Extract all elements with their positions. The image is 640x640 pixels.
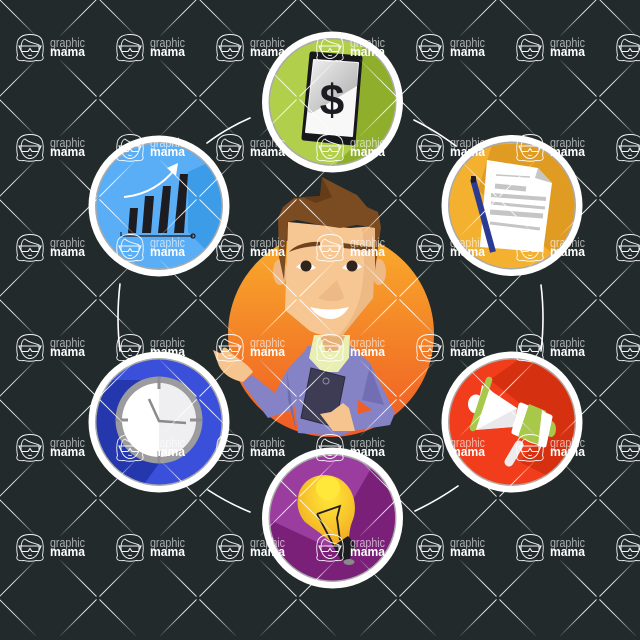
graphicmama logo watermarks: graphic — [450, 36, 485, 50]
graphicmama logo watermarks: graphic — [250, 36, 285, 50]
graphicmama logo watermarks: mama — [350, 44, 386, 59]
graphicmama logo watermarks: graphic — [450, 436, 485, 450]
clock hands — [149, 399, 186, 423]
gap between arm and body — [358, 400, 372, 414]
graphicmama logo watermarks: graphic — [450, 136, 485, 150]
paper — [480, 160, 552, 252]
bulb glass — [298, 475, 355, 547]
graphicmama logo watermarks: graphic — [150, 536, 185, 550]
graphicmama logo watermarks: mama — [350, 244, 386, 259]
graphicmama logo watermarks: graphic — [550, 436, 585, 450]
connector arcs between icons — [118, 118, 543, 512]
graphicmama logo watermarks: graphic — [250, 136, 285, 150]
icon: light bulb — [260, 448, 403, 590]
megaphone green bump — [546, 421, 556, 437]
graphicmama logo watermarks: graphic — [150, 336, 185, 350]
icon: phone with dollar sign — [262, 32, 410, 172]
graphicmama logo watermarks: graphic — [150, 436, 185, 450]
megaphone head — [514, 405, 550, 445]
smile — [310, 307, 349, 319]
ears — [273, 259, 287, 285]
graphicmama logo watermarks: mama — [50, 144, 86, 159]
orange backdrop circle — [228, 231, 434, 437]
face — [285, 222, 376, 336]
central businessman illustration — [213, 177, 434, 437]
graphicmama logo watermarks: graphic — [450, 536, 485, 550]
graphicmama logo watermarks: graphic — [150, 36, 185, 50]
graphicmama logo watermarks: mama — [550, 244, 586, 259]
graphicmama logo watermarks: graphic — [350, 36, 385, 50]
graphicmama logo watermarks: mama — [350, 544, 386, 559]
phone body — [304, 54, 360, 143]
bulb filament — [317, 506, 340, 546]
graphicmama logo watermarks: mama — [450, 544, 486, 559]
clock face — [122, 383, 196, 457]
icon: document and pen — [442, 135, 582, 276]
graphicmama logo watermarks: graphic — [550, 336, 585, 350]
graphicmama logo watermarks: mama — [150, 544, 186, 559]
graphicmama logo watermarks: mama — [250, 344, 286, 359]
graphicmama logo watermarks: graphic — [50, 436, 85, 450]
graphicmama logo watermarks: graphic — [250, 436, 285, 450]
graphicmama logo watermarks: graphic — [250, 236, 285, 250]
graphicmama logo watermarks: mama — [250, 544, 286, 559]
graphicmama logo watermarks: mama — [350, 144, 386, 159]
graphicmama logo watermarks: graphic — [50, 236, 85, 250]
graphicmama logo watermarks: mama — [450, 44, 486, 59]
pen — [473, 179, 493, 252]
graphicmama logo watermarks: mama — [450, 144, 486, 159]
graphicmama logo watermarks: graphic — [550, 36, 585, 50]
eyebrows — [289, 242, 320, 252]
bulb base — [333, 536, 356, 560]
megaphone cone — [473, 385, 517, 430]
graphicmama logo watermarks: graphic — [50, 36, 85, 50]
graphicmama logo watermarks: graphic — [550, 136, 585, 150]
clock ticks — [116, 377, 202, 463]
paper lines — [490, 175, 546, 229]
graphicmama logo watermarks: mama — [350, 344, 386, 359]
graphicmama logo watermarks: graphic — [550, 236, 585, 250]
graphicmama logo watermarks: mama — [250, 144, 286, 159]
jacket torso — [293, 345, 395, 436]
icon: clock — [88, 352, 230, 492]
graphicmama logo watermarks: mama — [50, 444, 86, 459]
hair — [278, 177, 381, 280]
graphicmama logo watermarks: mama — [50, 544, 86, 559]
axis — [121, 232, 193, 236]
graphicmama logo watermarks: graphic — [250, 536, 285, 550]
left hand — [213, 348, 253, 382]
icon: rising bar chart — [88, 136, 230, 276]
graphicmama logo watermarks: mama — [450, 244, 486, 259]
nose — [318, 280, 344, 301]
graphicmama logo watermarks: graphic — [350, 536, 385, 550]
graphicmama logo watermarks: mama — [250, 444, 286, 459]
graphicmama logo watermarks: mama — [150, 44, 186, 59]
graphicmama logo watermarks: graphic — [50, 536, 85, 550]
graphicmama logo watermarks: graphic — [150, 236, 185, 250]
graphicmama logo watermarks: graphic — [250, 336, 285, 350]
graphicmama logo watermarks: mama — [50, 44, 86, 59]
graphicmama logo watermarks: graphic — [350, 436, 385, 450]
megaphone rear — [468, 394, 484, 414]
graphicmama logo watermarks: graphic — [550, 536, 585, 550]
graphicmama logo watermarks: mama — [550, 144, 586, 159]
graphicmama logo watermarks: mama — [450, 344, 486, 359]
icon: megaphone — [442, 352, 585, 492]
graphicmama logo watermarks: mama — [550, 544, 586, 559]
graphicmama logo watermarks: graphic — [50, 336, 85, 350]
graphicmama logo watermarks: mama — [450, 444, 486, 459]
graphicmama logo watermarks: graphic — [450, 236, 485, 250]
bars — [128, 174, 188, 233]
clock rim — [116, 376, 202, 464]
eyes — [296, 260, 362, 272]
megaphone handle — [509, 445, 519, 462]
graphicmama logo watermarks: mama — [550, 444, 586, 459]
graphicmama logo watermarks: mama — [150, 244, 186, 259]
tablet — [301, 368, 345, 427]
graphicmama logo watermarks: mama — [550, 44, 586, 59]
dollar sign: $ — [320, 76, 344, 125]
graphicmama logo watermarks: graphic — [350, 336, 385, 350]
shirt collar and neck — [309, 335, 350, 372]
graphicmama logo watermarks: mama — [50, 244, 86, 259]
graphicmama logo watermarks: mama — [350, 444, 386, 459]
jacket sleeve — [242, 347, 308, 418]
growth arrow — [124, 169, 175, 197]
graphicmama logo watermarks: graphic — [150, 136, 185, 150]
graphicmama logo watermarks: mama — [550, 344, 586, 359]
graphicmama logo watermarks: mama — [250, 44, 286, 59]
graphicmama logo watermarks: graphic — [350, 236, 385, 250]
right hand — [320, 403, 355, 431]
graphicmama logo watermarks: graphic — [50, 136, 85, 150]
graphicmama logo watermarks: mama — [150, 144, 186, 159]
graphicmama logo watermarks: mama — [150, 444, 186, 459]
graphicmama logo watermarks: mama — [150, 344, 186, 359]
graphicmama logo watermarks: graphic — [350, 136, 385, 150]
graphicmama logo watermarks: mama — [250, 244, 286, 259]
graphicmama logo watermarks: mama — [50, 344, 86, 359]
graphicmama logo watermarks: graphic — [450, 336, 485, 350]
